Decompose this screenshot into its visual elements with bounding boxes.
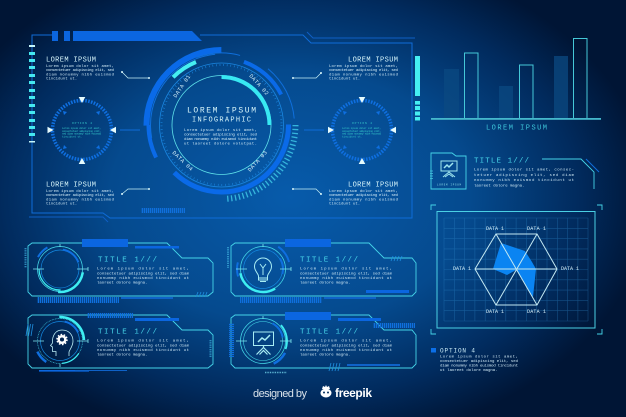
panel: title card top left: [26, 235, 213, 303]
central title: INFOGRAPHIC: [192, 116, 251, 124]
panel: title with presentation icon: LOREM IPSUM: [437, 184, 461, 186]
panel: title card bottom right: [229, 307, 416, 375]
radar labels: DATA 1: [453, 266, 471, 272]
text block: top left: LOREM IPSUM: [46, 56, 96, 64]
footer: freepik credit: [253, 385, 372, 400]
text block: bottom left: [46, 182, 115, 207]
text block: top right: diam nonummy nibh euismod: [329, 72, 399, 77]
panel: title with presentation icon: laoreet dolore magna.: [474, 183, 524, 188]
text block: top left: tincidunt ut.: [46, 77, 77, 82]
panel: title card bottom left: TITLE 1///: [98, 328, 157, 336]
ring labels: DATA 03: [246, 149, 269, 173]
radar hexagon: [475, 234, 557, 305]
radar labels: DATA 1: [486, 226, 504, 232]
panel: title card top right: nonummy nibh euismod tincidunt ut: [300, 276, 392, 281]
text block: bottom left: consectetuer adipiscing elit, sed: [46, 193, 115, 198]
radar labels: DATA 1: [527, 226, 546, 232]
radar chart panel: [431, 205, 602, 334]
text block: top right: [329, 56, 399, 82]
radar labels: DATA 1: [527, 309, 546, 315]
text block: top right: tincidunt ut.: [329, 77, 360, 82]
dial: option left: consectetuer adipiscing elit,: [62, 129, 101, 133]
legend: option 4: consectetuer adipiscing elit, sed: [440, 359, 519, 364]
footer: freepik credit: freepik: [335, 386, 372, 400]
panel: title card top left: consectetuer adipiscing elit, sed diam: [97, 271, 190, 276]
panel: title with presentation icon: Lorem ipsum dolor sit amet, consec-: [474, 168, 574, 172]
panel: title with presentation icon: tetuer adipiscing elit, sed diam: [474, 173, 575, 178]
text block: top left: diam nonummy nibh euismod: [46, 72, 115, 77]
footer: freepik credit: designed by: [253, 388, 308, 400]
text block: bottom right: LOREM IPSUM: [348, 182, 398, 190]
central title: [184, 106, 258, 146]
radar labels: DATA 1: [486, 309, 504, 315]
text block: top right: consectetuer adipiscing elit, sed: [329, 68, 399, 73]
dial: option left: OPTION 4: [72, 122, 92, 125]
legend: option 4: ut laoreet dolore magna.: [440, 368, 498, 373]
radar data shape: [493, 243, 536, 297]
ring gauge: [26, 235, 94, 303]
panel: title card bottom right: nonummy nibh euismod tincidunt ut: [300, 348, 392, 353]
connector lines: [120, 71, 324, 195]
legend: option 4: diam nonummy nibh euismod tincidunt: [440, 364, 518, 368]
panel: title card top left: laoreet dolore magna.: [97, 281, 147, 286]
panel: title card bottom left: [25, 306, 213, 376]
text block: bottom right: consectetuer adipiscing elit, sed: [329, 193, 399, 198]
central ring chart: [119, 22, 324, 228]
text block: bottom right: Lorem ipsum dolor sit amet,: [329, 189, 398, 194]
screen frame: [32, 35, 412, 218]
icon: presentation chart: [254, 332, 274, 354]
ring gauge: [25, 306, 95, 376]
panel: title card top right: TITLE 1///: [300, 256, 358, 264]
text block: top left: [46, 56, 115, 82]
panel: main hologram screen: [29, 22, 420, 228]
ring labels: [171, 73, 270, 173]
radar corner brackets: [431, 205, 602, 334]
central title: Lorem ipsum dolor sit amet,: [184, 128, 257, 133]
panel: title card top right: Lorem ipsum dolor sit amet,: [300, 266, 392, 272]
panel: title card bottom right: laoreet dolore magna.: [300, 353, 350, 358]
top header bars: [52, 31, 202, 41]
panel: title card bottom left: Lorem ipsum dolor sit amet,: [97, 338, 189, 344]
legend: option 4: Lorem ipsum dolor sit amet,: [440, 354, 518, 360]
radar labels: [453, 226, 579, 315]
dial: option right: OPTION 4: [352, 122, 372, 125]
panel: title card top right: consectetuer adipiscing elit, sed diam: [300, 271, 393, 276]
panel: title card bottom right: consectetuer adipiscing elit, sed diam: [300, 343, 393, 348]
text block: bottom left: LOREM IPSUM: [46, 182, 96, 190]
left tick column: [29, 45, 35, 142]
dial: option right: tincidunt ut.: [342, 134, 362, 138]
text block: top right: LOREM IPSUM: [348, 56, 398, 64]
panel: title with presentation icon: TITLE 1///: [474, 158, 529, 166]
ring gauge: [229, 307, 297, 375]
dial: option right: consectetuer adipiscing elit,: [342, 129, 381, 133]
text block: top left: consectetuer adipiscing elit, sed: [46, 68, 115, 73]
text block: bottom right: tincidunt ut.: [329, 202, 360, 207]
text block: bottom left: diam nonummy nibh euismod: [46, 197, 115, 202]
hatched bar: [141, 208, 185, 213]
text block: bottom left: Lorem ipsum dolor sit amet,: [46, 189, 114, 194]
ring labels: DATA 04: [171, 149, 195, 173]
text block: top left: Lorem ipsum dolor sit amet,: [46, 64, 114, 69]
panel: title card top left: Lorem ipsum dolor sit amet,: [97, 266, 189, 272]
central title: ut laoreet dolore volutpat.: [184, 142, 257, 146]
icon: presentation board: [441, 161, 457, 177]
ring gauge: [225, 231, 301, 307]
panel: title card bottom right: TITLE 1///: [300, 328, 358, 336]
ring labels: DATA 02: [248, 73, 270, 97]
panel: title card top right: [225, 231, 416, 307]
panel: title card bottom left: consectetuer adipiscing elit, sed diam: [97, 343, 190, 348]
ring labels: DATA 01: [172, 73, 193, 99]
text block: bottom right: diam nonummy nibh euismod: [329, 197, 399, 202]
icon: light bulb: [254, 258, 272, 282]
right cyan gauge: [415, 56, 420, 120]
dial: option left: sed diam nonummy nibh euismod: [62, 132, 101, 136]
dial: option right: Lorem ipsum dolor sit amet,: [342, 126, 381, 130]
central title: consectetuer adipiscing elit, sed: [184, 132, 258, 138]
central title: diam nonummy nibh euismod tincidunt: [184, 137, 257, 142]
icon: head with gear: [50, 330, 73, 356]
screen outer lines: [29, 32, 415, 222]
panel: title with presentation icon: [430, 153, 599, 189]
text block: bottom right: [329, 182, 399, 207]
panel: title card top left: nonummy nibh euismod tincidunt ut: [97, 276, 189, 281]
panel: title card top right: laoreet dolore magna.: [300, 281, 350, 286]
text block: top right: Lorem ipsum dolor sit amet,: [329, 64, 398, 69]
legend: option 4: [431, 348, 519, 373]
dial: option right: sed diam nonummy nibh euismod: [342, 132, 381, 136]
dial: option left: [48, 97, 116, 164]
panel: title card bottom left: nonummy nibh euismod tincidunt ut: [97, 348, 189, 353]
panel: title with presentation icon: nonummy nibh euismod tincidunt ut: [474, 178, 574, 183]
panel: title card bottom right: Lorem ipsum dolor sit amet,: [300, 338, 392, 344]
dial: option left: Lorem ipsum dolor sit amet,: [62, 126, 101, 130]
central title: LOREM IPSUM: [187, 106, 256, 116]
dial: option left: tincidunt ut.: [62, 134, 82, 138]
bar chart: LOREM IPSUM: [486, 124, 547, 132]
panel: title card top left: TITLE 1///: [98, 256, 157, 264]
legend: option 4: OPTION 4: [440, 348, 475, 354]
dial: option right: [328, 97, 396, 164]
radar grid: [444, 218, 588, 321]
bar chart: [431, 38, 601, 132]
panel: title card bottom left: laoreet dolore magna.: [97, 353, 147, 358]
icon: freepik mascot: [320, 385, 332, 398]
radar labels: DATA 1: [561, 266, 579, 272]
text block: bottom left: tincidunt ut.: [46, 202, 77, 207]
